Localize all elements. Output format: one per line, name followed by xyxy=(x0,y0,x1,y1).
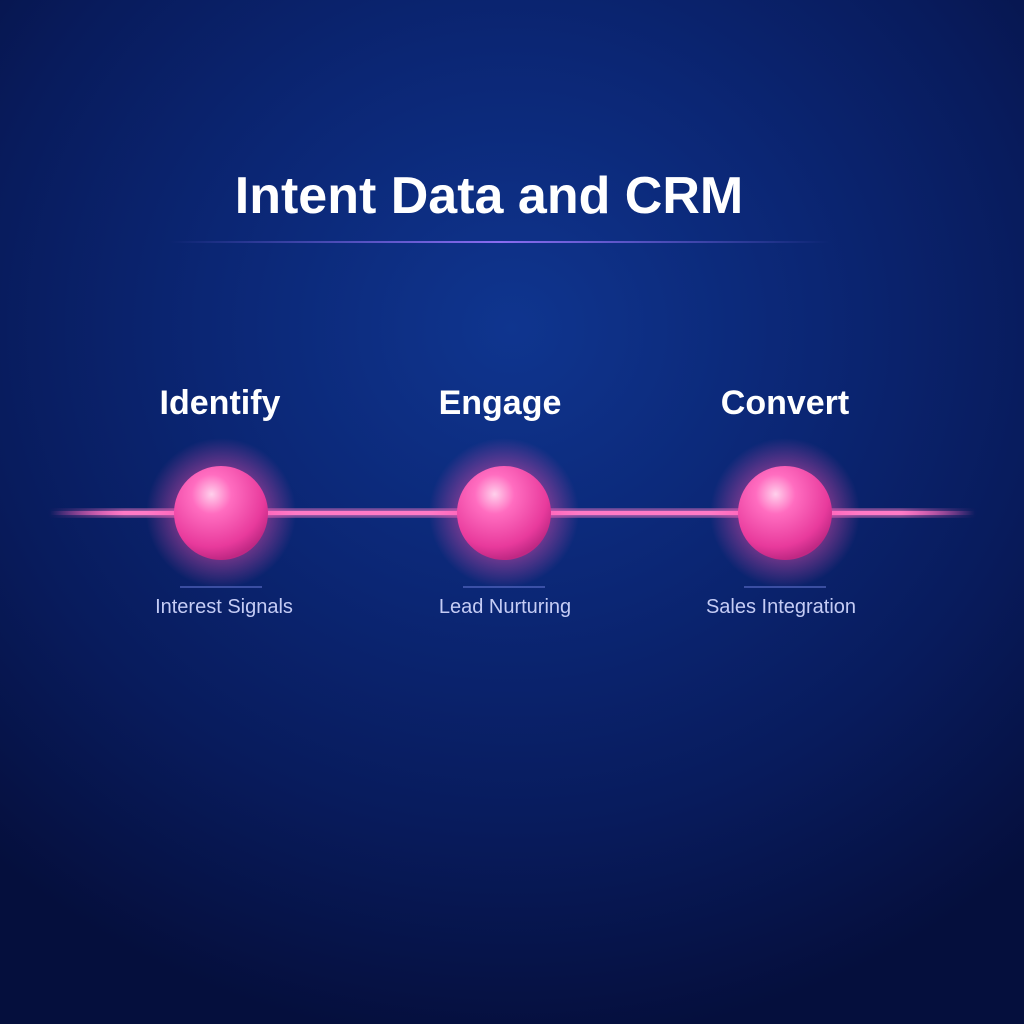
sphere: identify xyxy=(146,438,296,588)
sub: Interest Signals: Interest Signals xyxy=(155,596,293,618)
label: Identify: Identify xyxy=(160,384,280,422)
label: Engage: Engage xyxy=(439,384,561,422)
label: Convert: Convert xyxy=(721,384,849,422)
sub: Sales Integration: Sales Integration xyxy=(706,596,856,618)
glowing line xyxy=(50,509,975,517)
title: Intent Data and CRM xyxy=(235,167,743,225)
sphere: engage xyxy=(429,438,579,588)
title underline xyxy=(170,241,830,243)
sub: Lead Nurturing: Lead Nurturing xyxy=(439,596,571,618)
sphere: convert xyxy=(710,438,860,588)
